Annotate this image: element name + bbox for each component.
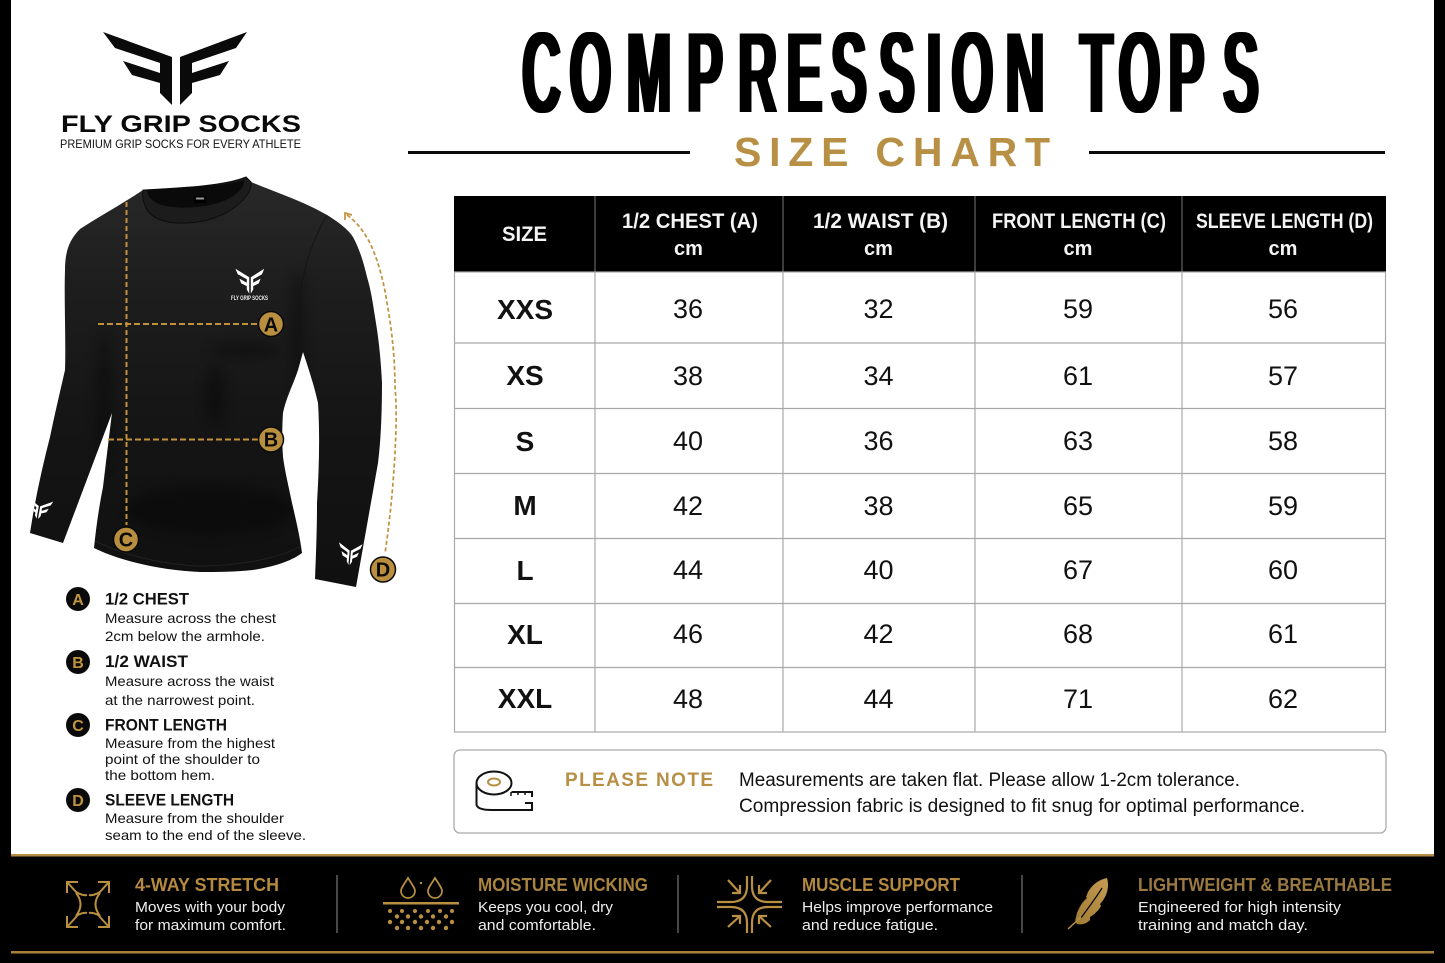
feature: moisture wicking: Keeps you cool, dry <box>478 899 614 916</box>
badge C: C <box>119 530 133 552</box>
waist guide <box>108 438 258 440</box>
badge B: B <box>264 430 278 452</box>
row XS: XS <box>506 360 544 391</box>
panel: please note <box>454 750 1386 833</box>
row XL: XL <box>507 619 543 650</box>
legend C: front length: FRONT LENGTH <box>105 716 227 734</box>
row L: 40 <box>863 555 894 585</box>
row XXS <box>497 294 1298 325</box>
feature: muscle support <box>717 875 993 934</box>
row S: 40 <box>673 426 703 456</box>
note text <box>739 770 1305 817</box>
badge D <box>370 557 396 582</box>
row S: 58 <box>1268 426 1298 456</box>
row L: L <box>516 555 534 586</box>
feature: lightweight and breathable: Engineered for high intensity <box>1138 899 1342 916</box>
row XXL: 44 <box>863 684 894 714</box>
legend B: waist: 1/2 WAIST <box>105 652 189 671</box>
feature: 4-way stretch: for maximum comfort. <box>135 917 286 934</box>
row S <box>516 426 1298 457</box>
row XXL: 48 <box>673 684 703 714</box>
icon: feather <box>1068 878 1108 929</box>
label: PLEASE NOTE <box>565 770 713 791</box>
note text: Compression fabric is designed to fit snug for optimal performance. <box>739 796 1305 817</box>
row S: 36 <box>863 426 894 456</box>
icon: converging arrows <box>717 876 782 933</box>
badge A <box>258 312 284 336</box>
row XS: 38 <box>673 361 703 391</box>
hem stitching <box>95 541 301 566</box>
note text: Measurements are taken flat. Please allow 1-2cm tolerance. <box>739 770 1240 791</box>
icon: tape measure <box>476 772 532 810</box>
legend D: sleeve length: D <box>72 793 84 810</box>
row XL: 42 <box>863 619 894 649</box>
legend C: front length: C <box>72 718 84 735</box>
collar rib <box>143 177 251 223</box>
row S: S <box>516 426 534 457</box>
logo <box>60 32 301 151</box>
row XS <box>506 360 1298 391</box>
shading <box>98 352 306 513</box>
legend C: front length <box>66 713 275 783</box>
legend D: sleeve length: SLEEVE LENGTH <box>105 790 234 810</box>
legend B: waist <box>66 650 274 708</box>
row XL: 68 <box>1063 619 1093 649</box>
title: COMPRESSION TOPS <box>522 9 1259 139</box>
table grid <box>454 272 1386 732</box>
legend B: waist: B <box>72 655 84 672</box>
feature: moisture wicking: and comfortable. <box>478 917 596 934</box>
row XXS: XXS <box>497 294 553 325</box>
footer band <box>11 854 1434 954</box>
legend A: chest: A <box>72 592 84 609</box>
brand name: FLY GRIP SOCKS <box>61 111 301 138</box>
row XXL: 71 <box>1063 684 1093 714</box>
legend D: sleeve length: Measure from the shoulder <box>105 810 284 826</box>
sleeve logo right <box>337 542 363 566</box>
table header: 1/2 CHEST (A) <box>622 210 758 233</box>
feature: muscle support: Helps improve performance <box>802 899 993 916</box>
row L: 60 <box>1268 555 1298 585</box>
measurement legend <box>66 587 306 843</box>
row M: 59 <box>1268 491 1298 521</box>
front length guide <box>126 202 128 525</box>
badge C <box>114 527 138 552</box>
legend A: chest: Measure across the chest <box>105 610 276 626</box>
icon: drops over fabric <box>383 878 459 930</box>
row XXL: 62 <box>1268 684 1298 714</box>
row XXL: XXL <box>498 683 552 714</box>
table header: cm <box>1064 238 1092 260</box>
feature: lightweight and breathable <box>1068 875 1392 934</box>
row L: 44 <box>673 555 703 585</box>
row XXL <box>498 683 1298 714</box>
table header: 1/2 WAIST (B) <box>813 210 948 233</box>
badge A: A <box>264 314 278 336</box>
armhole seam <box>300 215 327 352</box>
badge B <box>258 427 284 452</box>
legend A: chest <box>66 587 276 644</box>
table header: cm <box>864 238 893 260</box>
feature: 4-way stretch <box>67 875 286 934</box>
neck label <box>194 196 206 203</box>
row S: 63 <box>1063 426 1093 456</box>
feature: 4-way stretch: Moves with your body <box>135 899 286 916</box>
garment: compression top with measurement guides <box>24 177 396 587</box>
row M: 42 <box>673 491 703 521</box>
row L <box>516 555 1298 586</box>
chest logo <box>235 269 264 294</box>
chest logo wordmark: FLY GRIP SOCKS <box>231 296 268 302</box>
row XXS: 32 <box>863 294 894 324</box>
table header: cm <box>674 238 703 260</box>
feature: lightweight and breathable: training and match day. <box>1138 917 1308 934</box>
size table <box>454 196 1386 732</box>
legend A: chest: 2cm below the armhole. <box>105 628 265 644</box>
sleeve guide arrow <box>345 213 396 553</box>
row XS: 61 <box>1063 361 1093 391</box>
legend C: front length: Measure from the highest <box>105 735 275 751</box>
neck opening <box>147 180 244 208</box>
sleeve logo left <box>34 502 54 519</box>
table header: FRONT LENGTH (C) <box>992 210 1166 233</box>
logo mark right wing <box>180 32 247 105</box>
badge D: D <box>376 560 390 582</box>
row M <box>513 490 1298 521</box>
legend D: sleeve length <box>66 788 306 843</box>
subtitle: size chart: SIZE CHART <box>734 129 1050 175</box>
row XXS: 56 <box>1268 294 1298 324</box>
table header: cm <box>1269 238 1297 260</box>
row M: 65 <box>1063 491 1093 521</box>
feature: moisture wicking: MOISTURE WICKING <box>478 875 648 895</box>
legend B: waist: Measure across the waist <box>105 673 274 689</box>
row M: M <box>513 490 537 521</box>
feature: muscle support: and reduce fatigue. <box>802 917 938 934</box>
legend C: front length: point of the shoulder to <box>105 751 260 767</box>
row XL <box>507 619 1298 650</box>
legend C: front length: the bottom hem. <box>105 767 215 783</box>
feature: lightweight and breathable: LIGHTWEIGHT & BREATHABLE <box>1138 875 1392 895</box>
legend D: sleeve length: seam to the end of the sleeve. <box>105 827 306 843</box>
row XXS: 59 <box>1063 294 1093 324</box>
tagline: PREMIUM GRIP SOCKS FOR EVERY ATHLETE <box>60 137 301 151</box>
legend B: waist: at the narrowest point. <box>105 692 255 708</box>
row XXS: 36 <box>673 294 703 324</box>
feature: 4-way stretch: 4-WAY STRETCH <box>135 875 279 895</box>
feature: moisture wicking <box>383 875 648 934</box>
shirt body <box>30 177 382 587</box>
chest guide <box>98 323 258 325</box>
legend A: chest: 1/2 CHEST <box>105 590 190 608</box>
row XL: 46 <box>673 619 703 649</box>
row L: 67 <box>1063 555 1093 585</box>
table header <box>454 196 1386 272</box>
row XS: 34 <box>863 361 894 391</box>
row XL: 61 <box>1268 619 1298 649</box>
icon: four arrows <box>67 882 109 927</box>
row M: 38 <box>863 491 894 521</box>
table header: SLEEVE LENGTH (D) <box>1196 210 1373 233</box>
feature: muscle support: MUSCLE SUPPORT <box>802 875 960 895</box>
row XS: 57 <box>1268 361 1298 391</box>
logo mark <box>103 32 172 105</box>
table header: SIZE <box>502 223 547 246</box>
